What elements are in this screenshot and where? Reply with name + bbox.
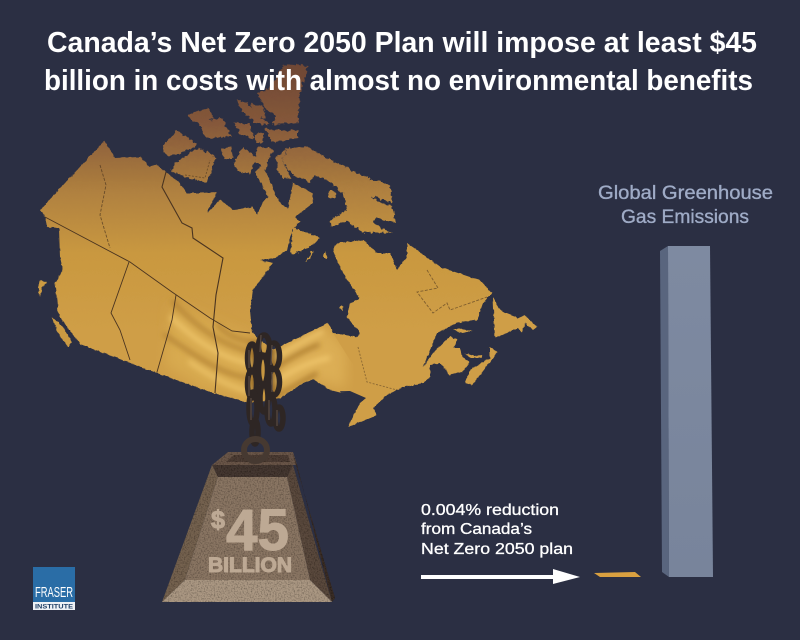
weight label: $ <box>211 506 225 534</box>
global emissions bar <box>660 246 713 577</box>
chain and ring <box>244 335 283 461</box>
logo: Fraser Institute: INSTITUTE <box>35 604 73 610</box>
title <box>44 27 757 97</box>
bar label: global greenhouse gas emissions <box>598 183 773 228</box>
bar label: global greenhouse gas emissions: Gas Emissions <box>621 207 749 228</box>
weight <box>162 452 335 602</box>
canada reduction sliver <box>594 572 641 577</box>
Atlantic islands <box>453 297 537 385</box>
callout: 0.004% reduction: Net Zero 2050 plan <box>421 541 573 558</box>
logo: Fraser Institute: FRASER <box>35 585 73 601</box>
Arctic islands <box>162 64 396 311</box>
province borders <box>45 160 487 393</box>
callout: 0.004% reduction: 0.004% reduction <box>421 502 559 519</box>
logo: Fraser Institute <box>33 567 75 610</box>
title: Canada’s Net Zero 2050 Plan will impose at least $45 <box>47 27 757 59</box>
weight label: 45 <box>226 498 289 563</box>
weight label: BILLION <box>208 554 292 577</box>
callout: 0.004% reduction <box>421 502 573 558</box>
title: billion in costs with almost no environmental benefits <box>44 65 753 97</box>
arrow <box>421 569 580 584</box>
bar label: global greenhouse gas emissions: Global Greenhouse <box>598 183 773 204</box>
mainland <box>40 141 492 427</box>
fabric folds at the chain <box>165 302 346 400</box>
weight body <box>162 452 335 602</box>
Vancouver Island and Haida Gwaii <box>38 280 72 347</box>
Lake Huron notch <box>340 391 366 403</box>
map of Canada <box>38 64 537 427</box>
weight label <box>208 498 292 577</box>
callout: 0.004% reduction: from Canada’s <box>421 521 532 538</box>
